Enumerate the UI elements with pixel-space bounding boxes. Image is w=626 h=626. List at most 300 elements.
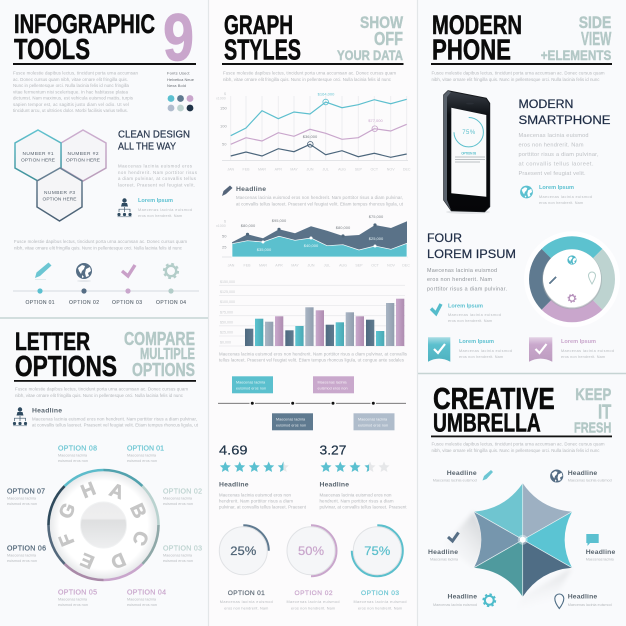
item: gear headline: Maecenas lacinia euismod	[433, 603, 477, 607]
bar chart: $50,000	[220, 320, 233, 324]
intro text: vitae fermentum nisi scelerisque. In hac habitasse platea	[13, 90, 129, 94]
hexagon 2: OPTION HERE	[66, 158, 100, 164]
text: bar chart caption: tellus laoreet. Praesent vel feugiat velit. Etiam tempus rhoncus ligula, ut congue ante sodales	[219, 358, 405, 362]
area chart: $80,000	[241, 223, 256, 228]
subtitle: compare multiple options: OPTIONS	[132, 360, 195, 380]
bar chart: $0,000	[220, 340, 231, 344]
icon: org chart	[117, 198, 132, 217]
area chart: $95,000	[272, 218, 287, 223]
area chart: $40,000	[304, 243, 319, 248]
panel: modern phone	[427, 10, 620, 362]
line chart: 150	[220, 106, 227, 110]
title: letter options: LETTER	[15, 328, 90, 356]
item: gear headline: Headline	[448, 594, 477, 600]
line chart: 100	[220, 124, 227, 128]
option labels: Maecenas lacinia	[127, 598, 157, 602]
gauge: 25 percent: OPTION 01	[228, 590, 265, 597]
headline block: Headline	[32, 408, 62, 414]
hexagon cluster	[15, 130, 106, 221]
line chart: AUG	[338, 168, 346, 172]
dial letters: A	[106, 480, 127, 504]
icon: gear	[164, 264, 178, 278]
text: clean design body: laoreet. Praesent vel feugiat velit.	[118, 182, 195, 188]
rating: 3.27	[320, 444, 407, 510]
area chart: JAN	[228, 264, 235, 268]
option labels: OPTION 08	[58, 446, 97, 452]
panel: infographic tools	[13, 0, 199, 306]
text: bar chart caption	[219, 352, 408, 362]
gauge: 75 percent: OPTION 03	[361, 590, 399, 597]
option timeline: OPTION 04	[156, 300, 186, 306]
text: letter intro	[15, 386, 188, 398]
bar chart: $125,000	[220, 290, 235, 294]
line chart: OCT	[371, 168, 379, 172]
text: letter intro: Fusce molestie dapibus lectus, tincidunt porta urna accumsan ac. Donec cursus quam	[15, 386, 188, 392]
dial letters	[55, 479, 152, 572]
line chart: x1000	[216, 96, 226, 100]
subtitle: show off your data: OFF	[374, 29, 403, 49]
letter dial	[48, 470, 159, 580]
text: four lorem body: eros non hendrerit. Nam	[427, 277, 492, 283]
dial letters: D	[107, 548, 128, 572]
headline block: Maecenas lacinia euismod eros non hendrerit. Nam porttitor risus a diam pulvinar,	[32, 416, 197, 422]
note: grey: euismod eros non	[358, 424, 388, 428]
title: letter options	[15, 328, 117, 383]
text: four lorem body: Maecenas lacinia euismod	[427, 268, 497, 274]
hexagon 2: NUMBER #2	[68, 151, 99, 157]
item: pin headline: Headline	[568, 594, 597, 600]
line chart: $	[224, 92, 226, 96]
area chart: 50	[222, 234, 227, 238]
icon: globe	[76, 263, 92, 282]
subtitle: keep it fresh: FRESH	[574, 420, 611, 436]
bar chart: $100,000	[220, 300, 235, 304]
hexagon 1: OPTION HERE	[21, 158, 55, 164]
callout: teal ribbon	[459, 339, 512, 359]
area chart: x1000	[216, 224, 226, 228]
text: umbrella intro	[432, 442, 605, 453]
callout: check: Lorem Ipsum	[448, 304, 483, 310]
callout: purple ribbon	[561, 339, 614, 359]
item: chat headline: Maecenas lacinia	[586, 558, 615, 562]
rating: 3.27: 3.27	[320, 444, 347, 458]
title: graph styles: STYLES	[224, 34, 301, 66]
timeline with notes	[218, 376, 406, 430]
area chart: $80,000	[336, 225, 351, 230]
area chart: FEB	[244, 264, 251, 268]
heading: modern smartphone	[518, 99, 611, 127]
option labels: OPTION 02	[163, 488, 202, 496]
rating: 3.27: Headline	[320, 482, 349, 488]
option timeline: OPTION 01	[26, 300, 55, 306]
hexagon 2	[61, 130, 106, 181]
gauge: 50 percent: eros non hendrerit. Nam	[291, 606, 335, 610]
area chart: SEP	[355, 264, 363, 268]
line chart: MAY	[290, 168, 298, 172]
option labels: Maecenas lacinia	[7, 496, 37, 500]
ribbon: teal check	[428, 337, 450, 362]
gauge: 75 percent: 75%	[364, 544, 391, 558]
icon: org chart	[13, 407, 27, 426]
item: check headline: Maecenas lacinia	[430, 558, 459, 562]
dial letters: C	[127, 528, 152, 548]
big number 9: 9	[163, 0, 194, 76]
text: phone intro	[432, 70, 605, 82]
donut icons	[567, 255, 577, 265]
callout: lorem ipsum: Maecenas lacinia euismod	[539, 195, 592, 199]
option timeline: OPTION 03	[112, 300, 142, 306]
note: navy: Maecenas lacinia	[276, 418, 306, 422]
note: purple	[313, 376, 354, 393]
item: chat headline	[586, 534, 616, 562]
line chart: JUN	[306, 168, 314, 172]
option labels	[7, 446, 202, 607]
area chart: NOV	[387, 264, 395, 268]
subtitle: compare multiple options: MULTIPLE	[140, 346, 195, 363]
title: letter options: OPTIONS	[15, 351, 117, 383]
rating: 4.69: pulvinar, at convallis tellus laoreet. Praesent	[219, 504, 307, 510]
intro text: tincidunt arcu, ut ultricies dolor. Morbi facilisis varius tellus.	[13, 108, 128, 113]
area chart: AUG	[339, 264, 347, 268]
icon: globe teal	[520, 186, 533, 198]
option labels: OPTION 06	[7, 546, 46, 552]
text: bar chart caption: Maecenas lacinia euismod eros non hendrerit. Nam porttitor risus a diam pulvinar, at convallis	[219, 352, 408, 356]
callout: lorem ipsum	[138, 198, 192, 218]
intro text: sapien tempor est, ac sagittis justo diam vel odio. Ut vel	[13, 102, 129, 107]
hexagon 3: NUMBER #3	[44, 190, 75, 196]
umbrella illustration	[444, 483, 572, 612]
note: teal	[232, 376, 273, 393]
callout: check: eros non hendrerit. Nam	[448, 319, 492, 323]
area chart: MAY	[291, 264, 299, 268]
gauge: 50 percent: 50%	[298, 544, 324, 558]
text: smartphone body: at convallis tellus laoreet.	[518, 162, 594, 168]
panel: graph styles	[216, 10, 411, 610]
subtitle: keep it fresh: IT	[598, 400, 612, 423]
heading: modern smartphone: MODERN	[518, 99, 574, 111]
bar chart: $75,000	[220, 310, 233, 314]
gauge: 75 percent: Maecenas lacinia euismod	[354, 600, 406, 604]
hexagon 1	[15, 130, 61, 181]
headline block: Headline	[236, 186, 266, 193]
ribbon: purple check	[529, 337, 552, 362]
subtitle: side view elements: SIDE	[579, 13, 611, 32]
subtitle: side view elements: +ELEMENTS	[541, 47, 611, 63]
icon: check	[122, 265, 135, 276]
option labels: Maecenas lacinia	[58, 454, 88, 458]
note: navy: euismod eros non	[276, 424, 306, 428]
headline block	[236, 186, 404, 206]
gauge: 50 percent: OPTION 02	[294, 590, 333, 597]
line chart: $164,000	[318, 92, 335, 96]
callout: lorem ipsum	[539, 185, 592, 205]
text: clean design body	[118, 164, 198, 188]
text: smartphone body: eros non hendrerit. Nam	[518, 142, 584, 148]
title: creative umbrella	[433, 381, 555, 438]
option labels: euismod eros non	[58, 603, 88, 607]
area chart: $25,000	[369, 236, 384, 241]
line chart: DEC	[403, 168, 411, 172]
area chart: $35,000	[257, 247, 272, 252]
text: graph intro: nibh, vitae ornare elit fringilla quis. Nunc in pellentesque orci. Nulla lacinia felis id nunc	[223, 77, 392, 82]
subtitle: side view elements	[541, 13, 611, 63]
item: pin headline	[555, 594, 612, 608]
headline block: Maecenas lacinia euismod eros non hendrerit. Nam porttitor risus a diam pulvinar,	[236, 195, 403, 200]
area chart: 25	[222, 244, 227, 250]
text: smartphone body: Praesent vel feugiat velit.	[518, 171, 586, 177]
callout: lorem ipsum: Maecenas lacinia euismod	[138, 208, 192, 212]
line chart: 50	[222, 142, 227, 146]
rating: 3.27: hendrerit. Nam porttitor risus a diam	[320, 498, 394, 504]
title: modern phone: PHONE	[432, 34, 511, 66]
line chart: SEP	[355, 168, 362, 172]
area chart: OCT	[371, 264, 380, 268]
option labels: OPTION 07	[7, 488, 45, 496]
item: pencil headline: Maecenas lacinia euismod	[433, 478, 477, 482]
title: modern phone: MODERN	[432, 10, 522, 40]
gauge: 50 percent	[286, 525, 340, 610]
data markers	[308, 99, 378, 147]
rating: 3.27: pulvinar, at convallis tellus laoreet. Praesent	[320, 504, 407, 510]
text: phone intro: Fusce molestie dapibus lectus, tincidunt porta urna accumsan ac. Donec cursus quam	[432, 70, 605, 76]
icon: pencil	[35, 262, 52, 280]
phone illustration	[444, 91, 490, 214]
callout: lorem ipsum: eros non hendrerit. Nam	[138, 214, 182, 218]
dial letters: E	[78, 548, 98, 572]
series: teal	[231, 99, 407, 136]
text: options intro: nibh, vitae ornare elit fringilla quis. Nunc in pellentesque orci. Nulla lacinia felis id nunc	[14, 246, 183, 250]
rating: 4.69: hendrerit. Nam porttitor risus a diam	[219, 498, 293, 504]
text: letter intro: nibh, vitae ornare elit fringilla quis. Nunc in pellentesque orci. Nulla lacinia felis id nunc	[15, 393, 184, 398]
subtitle: keep it fresh	[574, 385, 612, 436]
donut chart	[524, 231, 620, 327]
intro text: ac. Donec cursus quam nibh, vitae ornare elit fringilla quis.	[13, 77, 128, 82]
heading: four lorem ipsum: LOREM IPSUM	[427, 249, 516, 261]
option timeline	[13, 288, 199, 306]
line chart: FEB	[242, 168, 250, 172]
bar chart: $25,000	[220, 330, 233, 334]
gauge: 25 percent	[219, 525, 273, 610]
title: infographic tools: INFOGRAPHIC	[14, 9, 155, 39]
subtitle: show off your data: YOUR DATA	[337, 47, 403, 63]
note: navy	[272, 413, 313, 430]
option labels: OPTION 03	[163, 546, 202, 552]
rating: 4.69: Maecenas lacinia euismod eros non	[219, 492, 292, 498]
item: gear headline	[433, 594, 495, 607]
hexagon 3	[37, 168, 82, 221]
note: grey	[354, 413, 394, 430]
bar chart: $150,000	[220, 280, 235, 284]
text: umbrella intro: nibh, vitae ornare elit fringilla quis. Nunc in pellentesque orci. Nulla lacinia felis id nunc	[432, 448, 600, 453]
item: globe headline	[550, 469, 612, 483]
title: infographic tools	[14, 9, 155, 66]
dial centre button	[80, 502, 126, 548]
area chart: APR	[275, 264, 283, 268]
phone illustration: OPTION 03	[461, 152, 476, 156]
rating: 3.27: Maecenas lacinia euismod eros non	[320, 492, 392, 498]
subtitle: keep it fresh: KEEP	[575, 385, 611, 404]
rating: 4.69: 4.69	[219, 444, 248, 458]
text: options intro: Fusce molestie dapibus lectus, tincidunt porta urna accumsan ac. Donec cursus quam	[14, 239, 187, 244]
heading: modern smartphone: SMARTPHONE	[518, 115, 611, 127]
text: phone intro: nibh, vitae ornare elit fringilla quis. Nunc in pellentesque orci. Nulla lacinia felis id nunc	[432, 77, 600, 82]
subtitle: show off your data: SHOW	[360, 13, 404, 32]
subtitle: compare multiple options: COMPARE	[124, 329, 195, 349]
area chart: JUL	[324, 264, 330, 268]
text: options intro	[14, 239, 187, 250]
option labels: Maecenas lacinia	[163, 554, 193, 558]
item: pin headline: Maecenas lacinia euismod	[568, 603, 612, 607]
line chart: $36,000	[303, 134, 318, 139]
heading: clean design: ALL THE WAY	[118, 142, 176, 152]
callout: teal ribbon: Maecenas lacinia euismod	[459, 349, 512, 353]
option labels: euismod eros non	[7, 502, 37, 506]
rating: 4.69	[219, 444, 307, 510]
option timeline: OPTION 02	[69, 300, 99, 306]
callout: check: Maecenas lacinia euismod	[448, 313, 501, 317]
option labels: euismod eros non	[7, 559, 37, 563]
fonts used note: Helvetica Neue	[167, 77, 195, 82]
note: teal: euismod eros non	[236, 386, 266, 390]
option labels: euismod eros non	[163, 502, 193, 506]
title: infographic tools: TOOLS	[14, 34, 90, 66]
area chart: JUN	[308, 264, 315, 268]
item: pencil headline: Headline	[447, 470, 477, 477]
text: clean design body: Maecenas lacinia euismod eros	[118, 164, 193, 168]
fonts used note: Fonts Used:	[167, 70, 190, 76]
intro text: dictumst. Nam maximus, est vehicula euismod mattis, turpis	[13, 96, 134, 100]
title: creative umbrella: UMBRELLA	[433, 410, 541, 438]
line chart: MAR	[258, 168, 266, 172]
option labels: euismod eros non	[127, 603, 157, 607]
area chart: $	[224, 220, 226, 224]
line chart: JUL	[322, 168, 329, 172]
text: graph intro: Fusce molestie dapibus lectus, tincidunt porta urna accumsan ac. Donec cursus quam	[223, 70, 396, 76]
text: umbrella intro: Fusce molestie dapibus lectus, tincidunt porta urna accumsan ac. Donec cursus quam	[432, 442, 605, 446]
callout: teal ribbon: Lorem Ipsum	[459, 339, 494, 345]
text: smartphone body	[518, 133, 599, 177]
note: grey: Maecenas lacinia	[358, 418, 388, 422]
title: graph styles	[224, 10, 301, 66]
line chart	[216, 92, 411, 172]
intro text: Fusce molestie dapibus lectus, tincidunt porta urna accumsan	[13, 70, 139, 76]
gauge: 25 percent: 25%	[230, 544, 257, 558]
line chart: APR	[275, 168, 282, 172]
callout: check	[448, 304, 501, 323]
heading: four lorem ipsum: FOUR	[427, 233, 462, 245]
callout: purple ribbon: Lorem Ipsum	[561, 339, 596, 345]
text: clean design body: a diam pulvinar, at convallis tellus	[118, 176, 197, 181]
subtitle: compare multiple options	[124, 329, 195, 380]
area chart	[216, 214, 410, 268]
text: graph intro	[223, 70, 396, 82]
headline block: at convallis tellus laoreet. Praesent vel feugiat velit. Etiam tempus rhoncus ligula, ut	[32, 422, 199, 428]
text: clean design body: non hendrerit. Nam porttitor risus	[118, 170, 198, 175]
item: chat headline: Headline	[586, 549, 616, 556]
gauge: 75 percent	[352, 525, 406, 610]
headline block: at convallis tellus laoreet. Praesent vel feugiat velit. Etiam tempus rhoncus ligula, ut	[236, 202, 404, 206]
note: teal: Maecenas lacinia	[236, 380, 266, 384]
subtitle: side view elements: VIEW	[581, 29, 611, 49]
panel: creative umbrella	[428, 381, 616, 612]
line chart: JAN	[227, 168, 234, 172]
dial letters: H	[78, 479, 99, 503]
option labels: OPTION 04	[127, 590, 166, 596]
item: check headline	[428, 532, 459, 562]
rating: 4.69: Headline	[219, 482, 249, 488]
heading: clean design: CLEAN DESIGN	[118, 130, 190, 140]
series: purple	[231, 124, 407, 144]
panel: letter options	[7, 328, 202, 607]
intro text	[13, 70, 139, 113]
callout: purple ribbon: Maecenas lacinia euismod	[561, 349, 614, 353]
option labels: euismod eros non	[58, 459, 88, 463]
callout: lorem ipsum: Lorem Ipsum	[138, 198, 173, 204]
text: four lorem body: porttitor risus a diam pulvinar.	[427, 286, 507, 292]
hexagon 1: NUMBER #1	[22, 151, 54, 157]
icon: pencil	[222, 186, 232, 196]
text: smartphone body: Maecenas lacinia euismod	[518, 133, 588, 139]
option labels: OPTION 01	[127, 446, 164, 452]
note: purple: Maecenas lacinia	[318, 380, 347, 384]
option labels: euismod eros non	[163, 559, 193, 563]
gauge: 25 percent: Maecenas lacinia euismod	[220, 600, 273, 604]
title: creative umbrella: CREATIVE	[433, 381, 555, 416]
hexagon 3: OPTION HERE	[42, 196, 76, 202]
option labels: Maecenas lacinia	[127, 454, 157, 458]
title: graph styles: GRAPH	[224, 10, 293, 40]
fonts used note: Nexa Bold	[167, 83, 186, 88]
headline block	[32, 408, 199, 428]
option labels: Maecenas lacinia	[58, 598, 88, 602]
title: modern phone	[432, 10, 522, 66]
heading: four lorem ipsum	[427, 233, 516, 261]
panel: graph column background	[209, 0, 417, 626]
item: pencil headline	[433, 470, 493, 482]
gauge: 50 percent: Maecenas lacinia euismod	[286, 600, 340, 604]
gauge: 75 percent: eros non hendrerit. Nam	[358, 606, 402, 610]
area chart: $75,000	[369, 214, 384, 219]
area chart: MAR	[259, 264, 267, 268]
option labels: OPTION 05	[58, 590, 97, 596]
text: smartphone body: porttitor risus a diam pulvinar,	[518, 152, 599, 158]
callout: lorem ipsum: eros non hendrerit. Nam	[539, 201, 583, 205]
fonts used note	[167, 70, 195, 88]
gauge: 25 percent: eros non hendrerit. Nam	[224, 606, 268, 610]
note: purple: euismod eros non	[318, 386, 348, 390]
item: globe headline: Headline	[568, 470, 597, 477]
subtitle: show off your data	[337, 13, 404, 63]
option labels: Maecenas lacinia	[163, 496, 193, 500]
colour swatches	[168, 95, 193, 111]
icon: check teal	[431, 304, 441, 314]
item: check headline: Headline	[428, 549, 458, 556]
series: navy	[231, 144, 407, 157]
dial letters: F	[55, 530, 79, 549]
heading: clean design	[118, 130, 190, 152]
item: globe headline: Maecenas lacinia euismod	[568, 478, 612, 482]
area chart: DEC	[402, 264, 410, 268]
bar chart	[219, 280, 405, 346]
option labels: euismod eros non	[127, 459, 157, 463]
line chart: $77,000	[368, 118, 384, 123]
text: four lorem body	[427, 268, 507, 292]
callout: lorem ipsum: Lorem Ipsum	[539, 185, 574, 191]
intro text: Nunc in pellentesque orci. Nulla lacinia felis id nunc fringilla	[13, 83, 130, 88]
line chart: NOV	[387, 168, 395, 172]
callout: purple ribbon: eros non hendrerit. Nam	[561, 355, 605, 359]
option labels: Maecenas lacinia	[7, 554, 37, 558]
